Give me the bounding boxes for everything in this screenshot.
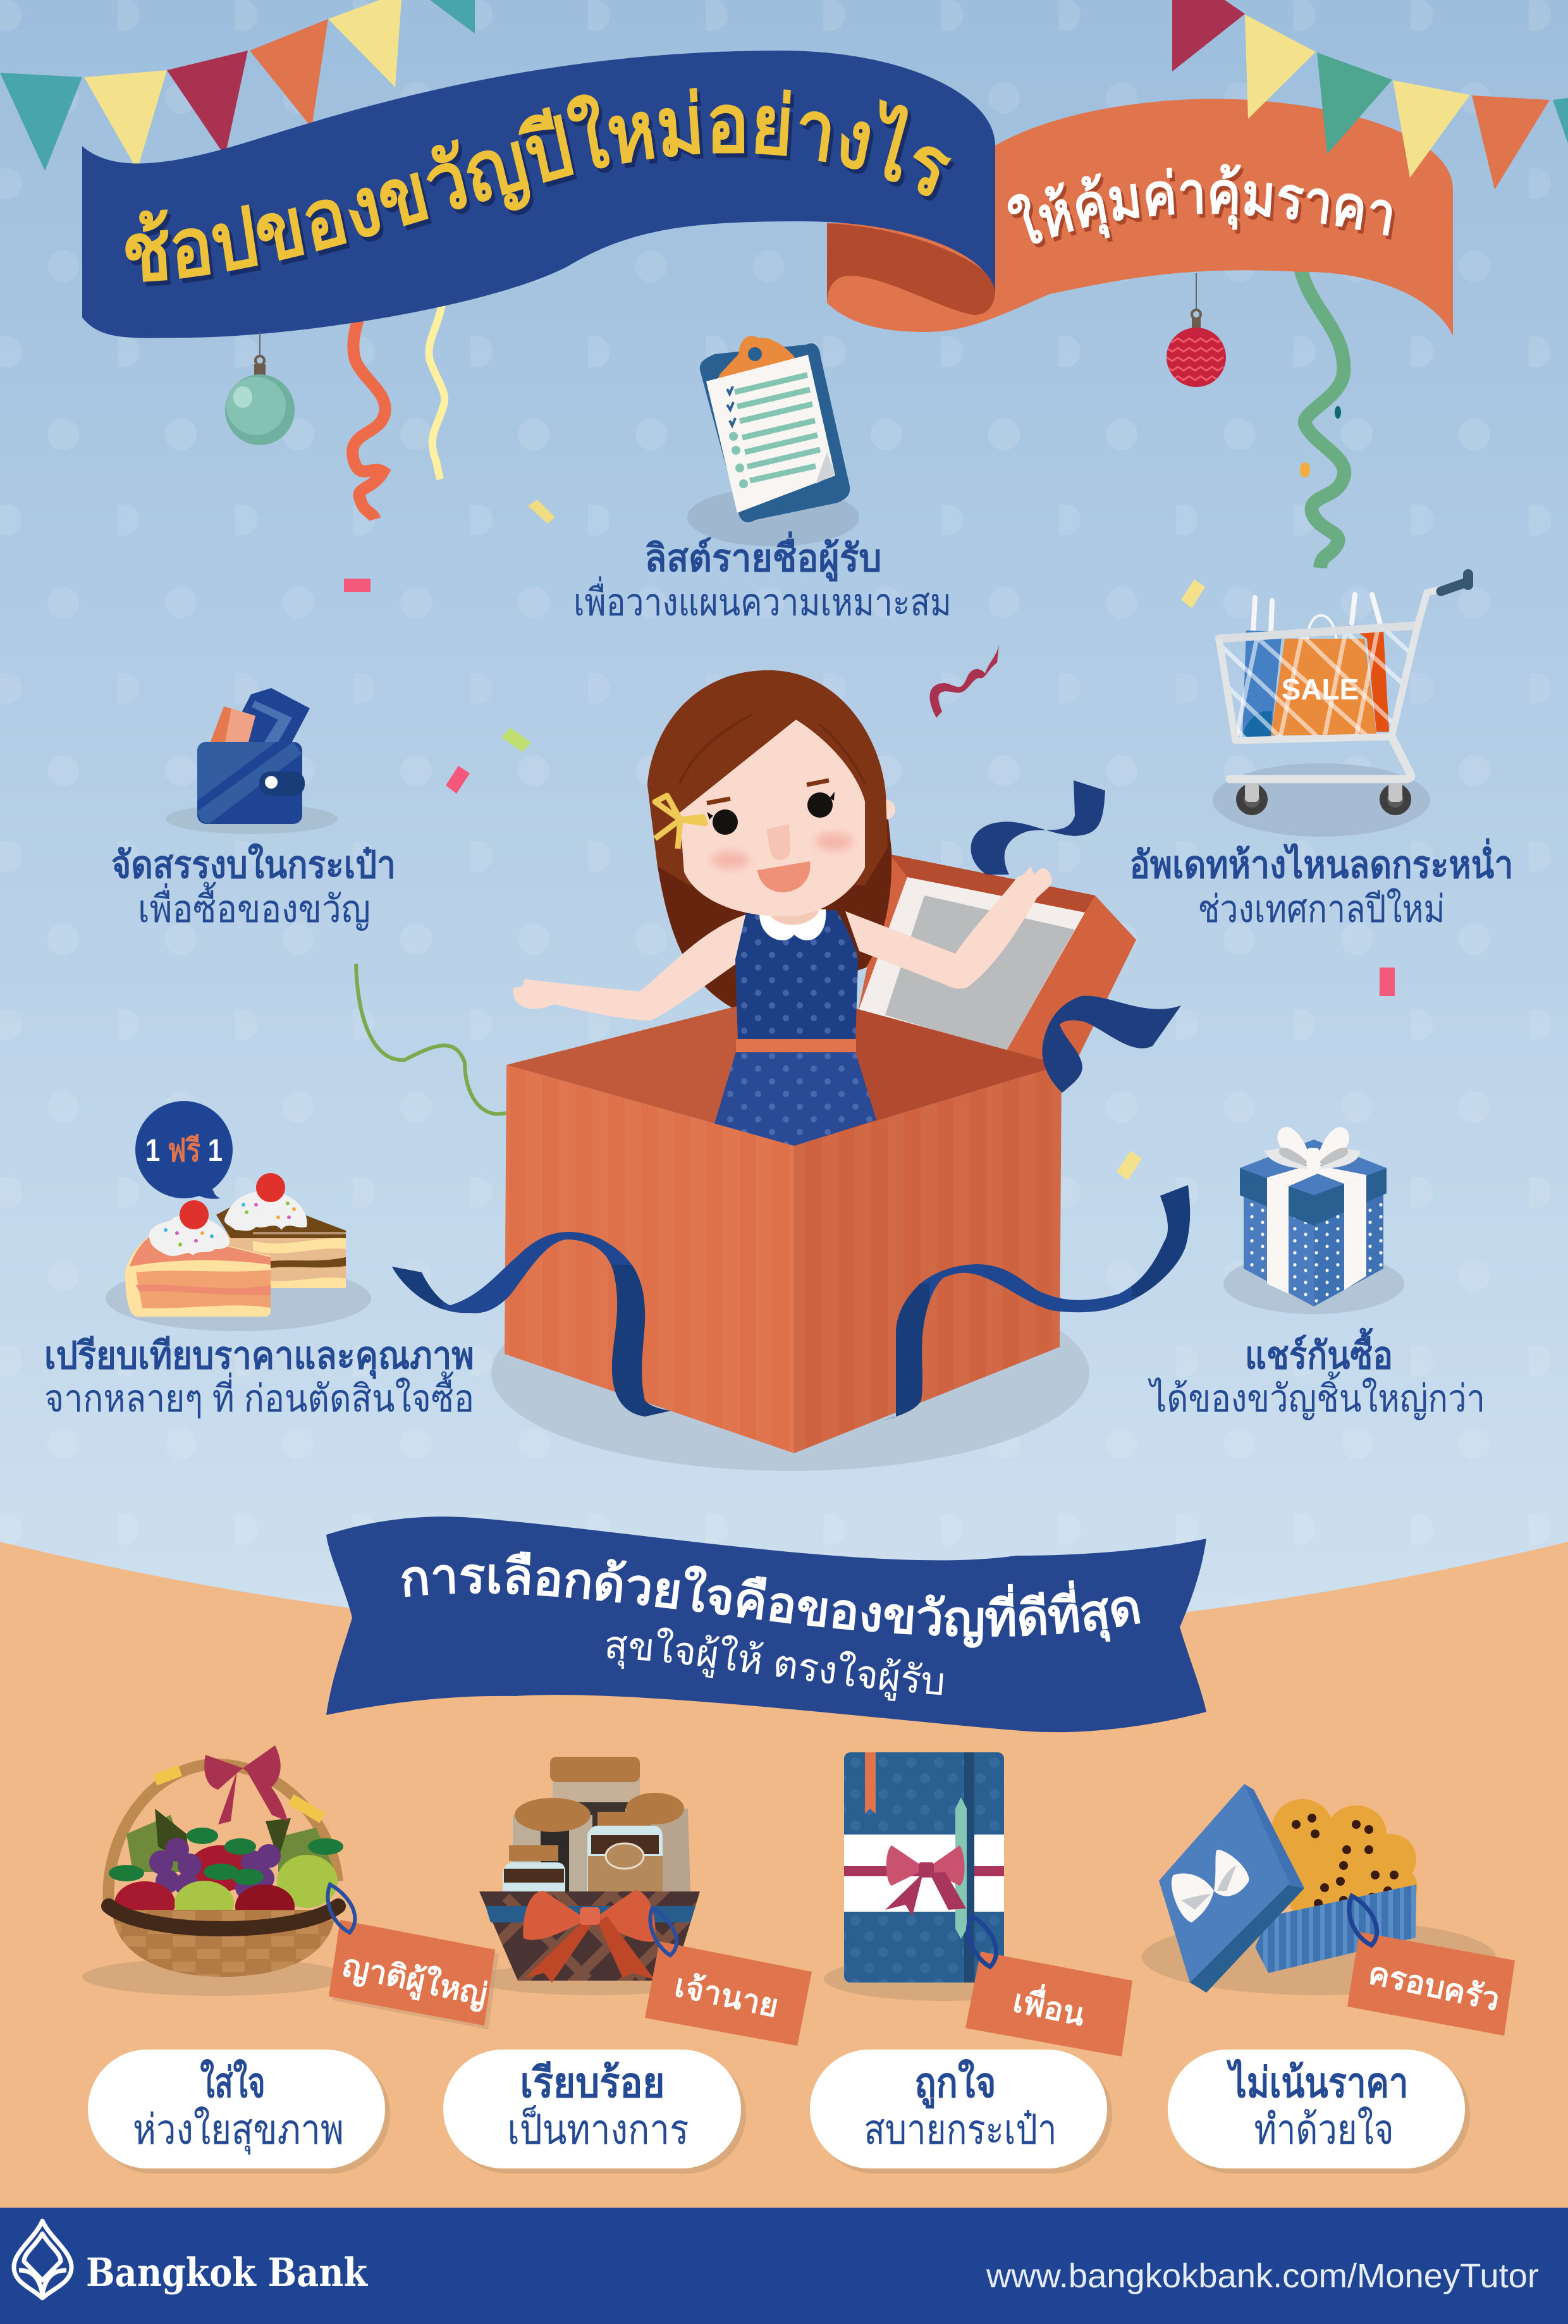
tag: family — [1347, 1896, 1515, 2036]
label: list recipients — [573, 531, 952, 624]
pill: liked — [810, 2050, 1112, 2173]
basket body — [113, 1910, 335, 1977]
tray — [479, 1891, 700, 1981]
open lid — [858, 854, 1136, 1090]
icon: shopping cart — [1213, 574, 1468, 837]
cheeks — [711, 833, 853, 869]
speech bubble: 1 ฟรี 1 — [145, 1133, 223, 1168]
ribbon: lid right — [1042, 996, 1181, 1093]
gift: cookies box — [1142, 1784, 1496, 1995]
pill: liked: สบายกระเป๋า — [864, 2106, 1057, 2153]
eyebrows — [707, 780, 829, 803]
pill: heartfelt: ไม่เน้นราคา — [1227, 2058, 1409, 2106]
pill: care — [88, 2050, 390, 2173]
speech bubble — [135, 1101, 233, 1199]
mouth — [757, 861, 810, 892]
bow — [523, 1890, 656, 1983]
dress — [714, 910, 876, 1146]
box faces — [505, 1065, 794, 1453]
cookies — [1272, 1799, 1418, 1924]
coffee jars — [503, 1812, 663, 1892]
sale text: SALE — [1282, 673, 1359, 706]
ground — [0, 1542, 1568, 2213]
label: sales: ช่วงเทศกาลปีใหม่ — [1197, 888, 1445, 930]
tag: relatives: ญาติผู้ใหญ่ — [339, 1946, 491, 2015]
tag: boss: เจ้านาย — [671, 1967, 781, 2024]
title: ช้อปของขวัญปีใหม่อย่างไร — [125, 87, 955, 286]
label: share: แชร์กันซื้อ — [1245, 1327, 1393, 1377]
tag: relatives — [328, 1884, 499, 2029]
cream and cherries — [149, 1173, 307, 1256]
pill: heartfelt: ทำด้วยใจ — [1254, 2106, 1393, 2153]
ornament: red bauble — [1167, 273, 1226, 387]
collar — [759, 909, 826, 940]
tag: friends — [965, 1916, 1132, 2057]
banner: blue ribbon with title — [82, 51, 995, 338]
box interior — [506, 992, 794, 1146]
cake: front — [125, 1230, 271, 1317]
bunting: right — [1172, 0, 1568, 190]
streamers under banner — [353, 266, 1344, 568]
label: list recipients: ลิสต์รายชื่อผู้รับ — [645, 531, 881, 582]
eyes — [707, 792, 835, 835]
coffee bags — [513, 1757, 690, 1892]
bow — [204, 1745, 288, 1824]
heading: การเลือกด้วยใจคือของขวัญที่ดีที่สุด — [401, 1551, 1141, 1648]
tag: friends: เพื่อน — [1010, 1979, 1089, 2032]
gift: fruit basket — [82, 1745, 348, 1996]
lid bow — [1172, 1850, 1249, 1922]
confetti — [344, 406, 1395, 1180]
banner fold — [827, 223, 995, 315]
hair ribbon — [655, 796, 705, 849]
label: sales: อัพเดทห้างไหนลดกระหน่ำ — [1129, 838, 1514, 886]
hair strands — [680, 715, 865, 784]
pill: formal — [443, 2050, 746, 2173]
subtitle: ให้คุ้มค่าคุ้มราคา — [1008, 164, 1395, 248]
banner: orange ribbon — [827, 99, 1453, 336]
label: budget: เพื่อซื้อของขวัญ — [138, 882, 371, 931]
tag: family: ครอบครัว — [1365, 1955, 1503, 2017]
pill: care: ห่วงใยสุขภาพ — [133, 2106, 344, 2155]
holly — [126, 1815, 335, 1872]
ribbon on lid — [971, 780, 1105, 875]
pill: heartfelt — [1168, 2050, 1470, 2173]
pill: formal: เรียบร้อย — [520, 2059, 665, 2106]
label: share — [1148, 1327, 1485, 1420]
bunting: left — [0, 0, 475, 171]
gift: notebook — [824, 1752, 1064, 2001]
icon: gift box — [1223, 1127, 1404, 1314]
basket handle — [108, 1764, 338, 1903]
background sky — [0, 0, 1568, 1771]
label: share: ได้ของขวัญชิ้นใหญ่กว่า — [1148, 1371, 1485, 1420]
tag: boss — [645, 1908, 812, 2046]
label: compare — [44, 1334, 474, 1420]
pill: liked: ถูกใจ — [914, 2058, 996, 2109]
lid — [1190, 1884, 1304, 1993]
pill: formal: เป็นทางการ — [507, 2105, 689, 2153]
website: www.bangkokbank.com/MoneyTutor — [986, 2257, 1539, 2295]
gift: coffee hamper — [474, 1757, 714, 1995]
label: compare: เปรียบเทียบราคาและคุณภาพ — [44, 1334, 474, 1379]
footer — [0, 2208, 1568, 2324]
nose — [766, 824, 790, 860]
subheading: สุขใจผู้ให้ ตรงใจผู้รับ — [607, 1628, 943, 1701]
icon: wallet — [166, 688, 338, 834]
ear — [875, 799, 895, 820]
face — [680, 720, 865, 916]
ribbon: box right — [883, 1185, 1190, 1420]
fruit — [109, 1828, 343, 1929]
bow — [885, 1845, 966, 1916]
ribbon: box left — [392, 1232, 670, 1417]
arms — [513, 914, 746, 1021]
icon: cakes with speech bubble — [106, 1101, 371, 1331]
hair back — [647, 670, 891, 1012]
label: list recipients: เพื่อวางแผนความเหมาะสม — [573, 576, 952, 624]
cake: back — [216, 1195, 346, 1288]
green ribbon — [356, 964, 506, 1114]
box front — [1255, 1884, 1416, 1973]
banner: middle — [326, 1516, 1206, 1733]
central illustration: girl in gift box — [356, 670, 1190, 1471]
label: sales — [1129, 838, 1514, 930]
logo mark — [14, 2221, 71, 2298]
ornament: green bauble — [225, 332, 295, 445]
logo text: Bangkok Bank — [86, 2249, 369, 2296]
hair top — [647, 670, 888, 885]
label: compare: จากหลายๆ ที่ ก่อนตัดสินใจซื้อ — [44, 1371, 474, 1420]
label: budget: จัดสรรงบในกระเป๋า — [111, 843, 396, 886]
box shadow — [491, 1275, 1089, 1471]
label: budget — [111, 843, 396, 931]
icon: clipboard — [687, 336, 859, 546]
pill: care: ใส่ใจ — [200, 2058, 266, 2106]
